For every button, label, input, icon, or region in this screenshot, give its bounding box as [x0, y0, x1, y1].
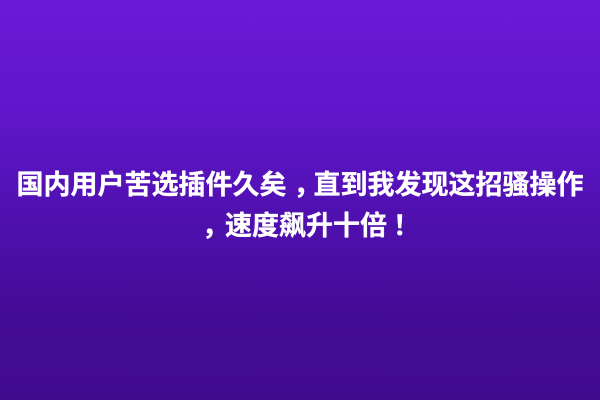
- title: ，速度飙升十倍！: [202, 211, 420, 241]
- title: [16, 170, 584, 241]
- title: 国内用户苦选插件久矣 ，直到我发现这招骚操作: [16, 170, 584, 200]
